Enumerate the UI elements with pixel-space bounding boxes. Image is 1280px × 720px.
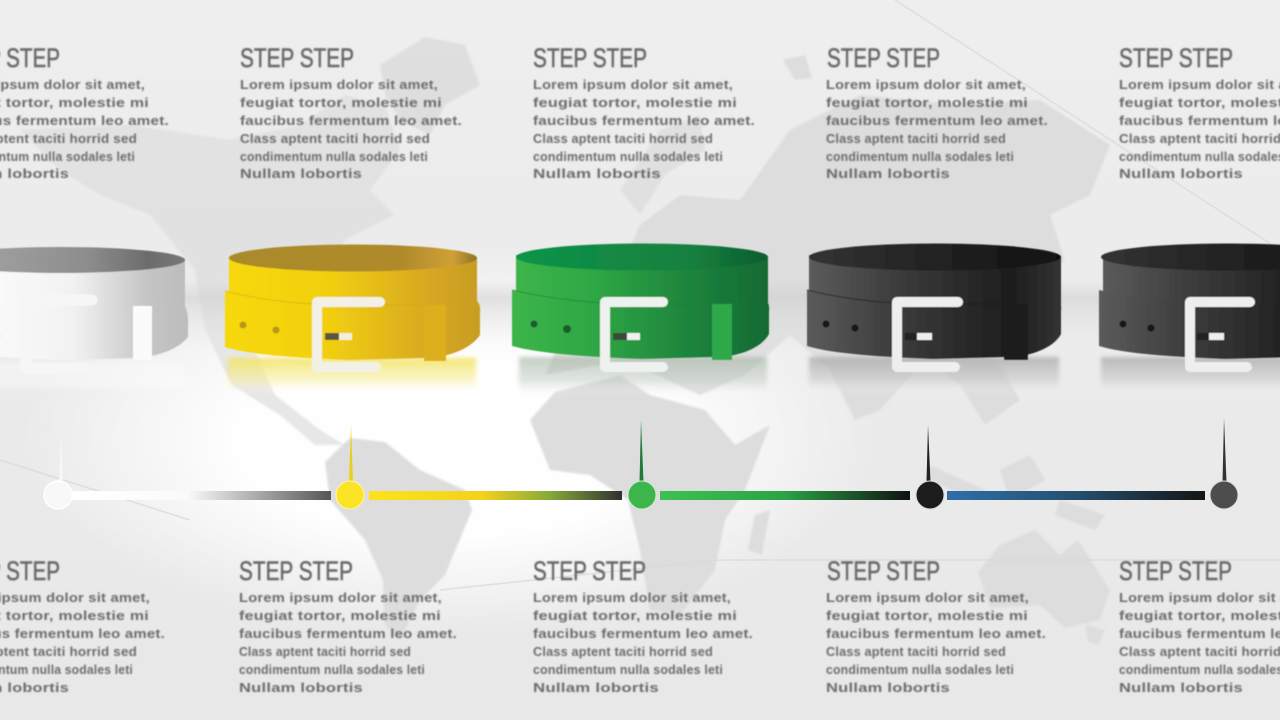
heading: STEP STEP: [240, 43, 354, 73]
holes: [530, 320, 571, 333]
column 4 top: text block: [826, 43, 1048, 181]
body text: Lorem ipsum dolor sit amet,: [826, 78, 1026, 92]
body text: Lorem ipsum dolor sit amet,: [533, 591, 731, 605]
upper band: [1103, 255, 1280, 314]
body text: [0, 591, 165, 695]
belt inner: [809, 244, 1061, 270]
body text: Nullam lobortis: [1119, 681, 1243, 695]
body text: Lorem ipsum dolor sit amet,: [239, 591, 442, 605]
belt 3: green: [512, 244, 769, 397]
body text: feugiat tortor, molestie mi: [533, 609, 737, 623]
body text: faucibus fermentum leo amet.: [826, 114, 1048, 128]
belt inner: [1101, 244, 1280, 270]
column 2 top: text block: [240, 43, 462, 181]
body text: Nullam lobortis: [239, 681, 363, 695]
timeline: [44, 418, 1238, 509]
map: eurasia: [545, 95, 1110, 425]
upper band: [229, 256, 477, 315]
body text: [239, 591, 457, 695]
map: africa: [530, 375, 770, 615]
keeper: [424, 305, 446, 361]
heading: STEP STEP: [827, 43, 940, 73]
body text: condimentum nulla sodales leti: [240, 150, 428, 164]
column 1 bottom: text block: [0, 556, 165, 695]
body text: faucibus fermentum leo amet.: [533, 627, 753, 641]
body text: faucibus fermentum leo amet.: [240, 114, 462, 128]
stem 5: [1222, 418, 1226, 482]
upper band: [516, 255, 768, 314]
body text: feugiat tortor, molestie mi: [240, 96, 442, 110]
body text: condimentum nulla sodales leti: [533, 663, 723, 677]
holes: [1120, 320, 1154, 332]
body text: feugiat tortor, molestie mi: [239, 609, 441, 623]
reflection: [228, 358, 476, 394]
node 1: [44, 481, 72, 509]
segment: white to grey: [70, 491, 331, 500]
stem 3: [640, 420, 644, 482]
node 2: [336, 481, 364, 509]
map: greenland: [380, 37, 480, 135]
body text: feugiat tortor, molestie mi: [826, 96, 1028, 110]
node 4: [916, 481, 944, 509]
world map: [20, 37, 1110, 645]
body text: Nullam lobortis: [826, 681, 950, 695]
body text: Lorem ipsum dolor sit amet,: [826, 591, 1029, 605]
holes: [822, 320, 858, 332]
segment: blue: [947, 491, 1205, 500]
keeper: [712, 304, 732, 360]
node 5: [1210, 481, 1238, 509]
heading: STEP STEP: [1119, 556, 1232, 586]
body text: Class aptent taciti horrid sed: [826, 132, 1006, 146]
buckle: [897, 302, 958, 367]
body text: Nullam lobortis: [826, 167, 950, 181]
lower band: [512, 290, 769, 359]
keeper: [133, 306, 152, 360]
floor highlight: [0, 280, 1280, 370]
body text: Class aptent taciti horrid sed: [826, 645, 1006, 659]
reflection: [1101, 357, 1280, 395]
buckle: [26, 300, 92, 368]
column 5 bottom: text block: [1119, 556, 1280, 695]
body text: [533, 591, 753, 695]
heading: STEP STEP: [827, 556, 940, 586]
buckle: [317, 302, 380, 367]
reflection: [0, 362, 183, 388]
band edge: [807, 290, 1008, 304]
body text: Class aptent taciti horrid sed: [533, 132, 713, 146]
body text: Class aptent taciti horrid sed: [239, 645, 411, 659]
lower band: [807, 290, 1061, 359]
body text: Nullam lobortis: [1119, 167, 1243, 181]
upper band: [809, 255, 1061, 314]
segment: green: [660, 491, 910, 500]
column 1 top: text block: [0, 43, 169, 181]
reflection: [809, 357, 1059, 395]
lower band: [225, 291, 480, 360]
map: scandinavia: [620, 115, 705, 215]
lower band: [0, 293, 188, 360]
map: australia: [978, 530, 1110, 628]
segment: yellow: [369, 491, 622, 500]
body text: condimentum nulla sodales leti: [826, 663, 1014, 677]
heading: STEP STEP: [1119, 43, 1233, 73]
body text: Class aptent taciti horrid sed: [533, 645, 713, 659]
body text: Lorem ipsum dolor sit amet,: [533, 78, 733, 92]
pin: [325, 333, 352, 340]
body text: [826, 78, 1048, 181]
buckle: [605, 302, 663, 367]
belt 4: black: [807, 244, 1061, 395]
body text: Nullam lobortis: [240, 167, 362, 181]
column 3 top: text block: [533, 43, 755, 181]
column 5 top: text block: [1119, 43, 1280, 181]
body text: condimentum nulla sodales leti: [533, 150, 723, 164]
belt inner: [516, 244, 768, 270]
belt inner: [229, 244, 477, 272]
lower band: [1099, 290, 1280, 359]
keeper: [1004, 304, 1028, 360]
body text: [240, 78, 462, 181]
holes: [240, 322, 280, 334]
body text: feugiat tortor, molestie mi: [1119, 96, 1280, 110]
body text: condimentum nulla sodales leti: [239, 663, 425, 677]
stem 4: [926, 425, 930, 482]
column 3 bottom: text block: [533, 556, 753, 695]
column 2 bottom: text block: [239, 556, 457, 695]
band edge: [512, 290, 716, 304]
body text: Class aptent taciti horrid sed: [240, 132, 430, 146]
body text: [533, 78, 755, 181]
stem 1: [59, 435, 63, 482]
belt 1: white: [0, 247, 188, 388]
body text: feugiat tortor, molestie mi: [533, 96, 737, 110]
heading: STEP STEP: [533, 43, 647, 73]
body text: faucibus fermentum leo amet.: [239, 627, 457, 641]
reflection: [519, 357, 767, 397]
buckle: [1190, 302, 1250, 367]
map: small islands: [783, 55, 1105, 645]
body text: Lorem ipsum dolor sit amet,: [240, 78, 438, 92]
body text: faucibus fermentum leo amet.: [533, 114, 755, 128]
body text: feugiat tortor, molestie mi: [1119, 609, 1280, 623]
band edge: [225, 291, 425, 305]
map: south america: [325, 438, 472, 640]
column 4 bottom: text block: [826, 556, 1046, 695]
belt 5: dark grey: [1099, 244, 1280, 395]
map: indonesia: [925, 455, 1105, 530]
map: madagascar: [748, 510, 770, 555]
body text: Nullam lobortis: [533, 167, 661, 181]
stem 2: [349, 425, 353, 482]
body text: Nullam lobortis: [533, 681, 659, 695]
belt inner: [0, 247, 185, 273]
body text: faucibus fermentum leo amet.: [826, 627, 1046, 641]
heading: STEP STEP: [533, 556, 646, 586]
body text: feugiat tortor, molestie mi: [826, 609, 1028, 623]
heading: STEP STEP: [239, 556, 353, 586]
node 3: [628, 481, 656, 509]
upper band: [0, 256, 185, 315]
body text: condimentum nulla sodales leti: [826, 150, 1014, 164]
pin: [1197, 333, 1224, 340]
belt 2: yellow: [225, 244, 480, 394]
body text: [0, 78, 169, 181]
body text: [1119, 78, 1280, 181]
body text: [1119, 591, 1280, 695]
body text: [826, 591, 1046, 695]
pin: [613, 333, 640, 340]
pin: [905, 333, 932, 340]
map: north america: [20, 95, 400, 445]
